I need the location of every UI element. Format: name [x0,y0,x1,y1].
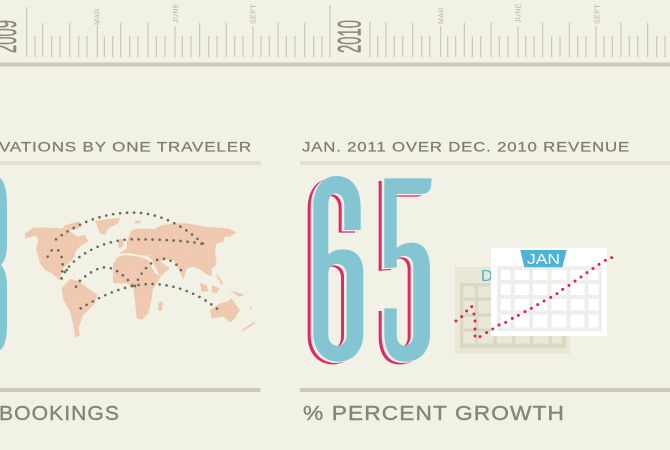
dotted continents: Americas [25,218,120,338]
calendar: december: D [481,268,493,285]
top rule [300,161,670,165]
top rule [0,161,260,165]
big number 65 [308,176,432,364]
heading: reservations: VATIONS BY ONE TRAVELER [0,138,252,154]
month labels: JUNE [173,3,180,23]
panel: reservations by one traveler [0,138,260,425]
month labels: MAR [438,7,446,24]
growth line dots [454,256,613,338]
ruler baseline [0,62,670,66]
caption: percent growth: % PERCENT GROWTH [303,402,565,425]
dotted continents: Old World [113,221,255,331]
month labels: SEPT [250,4,258,24]
route stops [46,249,68,271]
heading: revenue: JAN. 2011 OVER DEC. 2010 REVENUE [302,138,630,154]
ruler ticks 2010 [370,22,665,57]
panel: revenue growth [300,138,670,425]
calendar: january [491,248,607,336]
calendar illustration [454,248,613,354]
month labels: SEPT [594,4,602,24]
timeline ruler [0,3,670,66]
big numeral fragment [0,178,7,350]
world map with routes [25,213,255,338]
month labels [94,3,602,25]
calendar: december [455,267,570,354]
caption: bookings: BOOKINGS [0,402,120,425]
month labels: MAR [94,8,102,25]
ruler ticks 2009 [27,5,330,57]
calendar: january: JAN [527,251,560,268]
bottom rule [0,388,260,392]
january tab [520,250,567,267]
month labels: JUNE [516,3,522,23]
bottom rule [300,388,670,392]
travel routes [56,213,222,313]
